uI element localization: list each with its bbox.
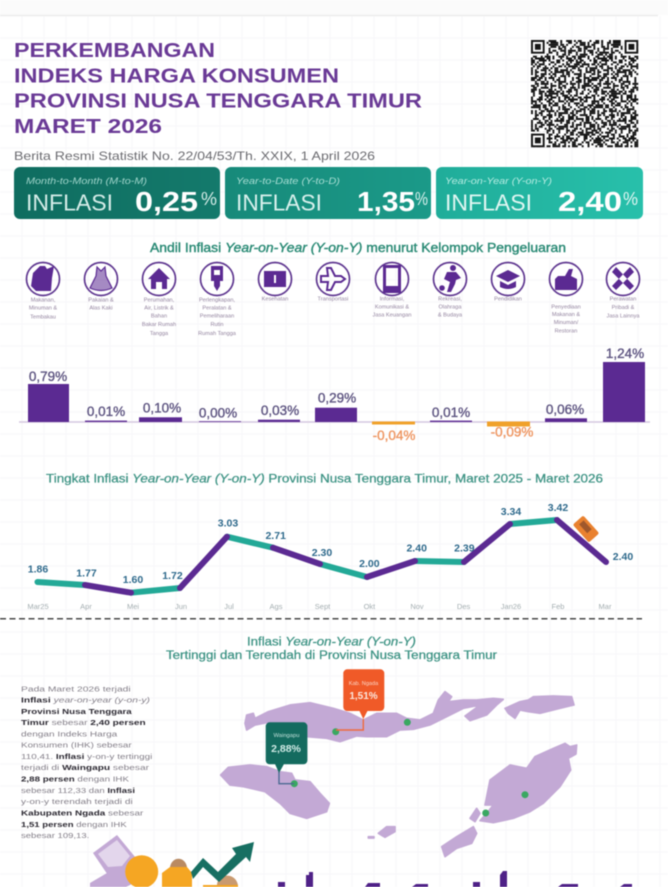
group labels: Minuman & [29, 306, 57, 312]
callout: Kab. Ngada lowest: Kab. Ngada [349, 681, 379, 687]
island: Flores [245, 692, 503, 742]
bar chart: contribution to inflation: 0,00% [199, 406, 237, 421]
group labels: Minuman/ [554, 320, 579, 326]
icon: coin [125, 855, 158, 887]
card: year-to-date inflation: 1,35 [357, 186, 415, 217]
text block: summary paragraph: sebesar 112,33 dan Inflasi [21, 786, 135, 795]
line chart: monthly y-on-y inflation: 1.72 [162, 570, 183, 582]
group labels: Perawatan [610, 297, 636, 303]
line chart: monthly y-on-y inflation: Jun [175, 602, 187, 611]
island: Timor [480, 743, 577, 823]
group labels: Restoran [555, 329, 577, 335]
heading: highest and lowest inflation: Tertinggi dan Terendah di Provinsi Nusa Tenggara Timur [166, 650, 497, 662]
group labels: Makanan, [31, 298, 56, 304]
title: MARET 2026 [14, 116, 162, 138]
island: Sabu [368, 827, 395, 838]
card: month-to-month inflation: Month-to-Month (M-to-M) [26, 176, 147, 187]
bar chart: contribution to inflation: 0,29% [318, 391, 356, 406]
bar chart: contribution to inflation: 0,10% [143, 401, 181, 416]
title: PROVINSI NUSA TENGGARA TIMUR [14, 90, 423, 112]
line chart: monthly y-on-y inflation: Nov [410, 602, 424, 611]
icon: banknotes [93, 835, 150, 887]
line chart: monthly y-on-y inflation: Feb [552, 602, 564, 611]
icon: household equipment [211, 266, 223, 291]
map: Nusa Tenggara Timur [221, 692, 577, 857]
group labels: Bahan [151, 314, 167, 320]
heading: inflation trend: Tingkat Inflasi Year-on-Year (Y-on-Y) Provinsi Nusa Tenggara Timur, Maret 2025 - Maret 2026 [46, 474, 603, 486]
line chart: monthly y-on-y inflation: Jan26 [501, 602, 521, 611]
line chart: monthly y-on-y inflation: Jul [224, 602, 234, 611]
group labels: Makanan & [552, 312, 580, 318]
group labels: Komunikasi & [375, 304, 409, 310]
group labels [29, 297, 640, 337]
group labels: Pakaian & [88, 298, 114, 304]
illustration: money, coins and rising arrow [90, 835, 254, 887]
icon row with group labels [26, 262, 640, 337]
line chart: monthly y-on-y inflation: 2.40 [613, 551, 633, 563]
card: year-on-year inflation: Year-on-Year (Y-on-Y) [445, 176, 552, 187]
line chart: monthly y-on-y inflation [27, 502, 633, 611]
QR code [531, 40, 638, 147]
line chart: monthly y-on-y inflation: Sept [315, 602, 331, 611]
group labels: Kesehatan [262, 297, 288, 303]
text block: summary paragraph: 2,88 persen dengan IHK [21, 775, 129, 784]
line chart: monthly y-on-y inflation: 1.60 [123, 574, 143, 586]
text block: summary paragraph: Konsumen (IHK) sebesar [21, 741, 132, 750]
text block: summary paragraph: 110,41. Inflasi y-on-y tertinggi [21, 752, 153, 761]
island: Sumba [221, 765, 329, 818]
line chart: monthly y-on-y inflation: 2.71 [265, 530, 286, 542]
map markers [291, 719, 528, 816]
card: month-to-month inflation [14, 167, 220, 219]
line chart: monthly y-on-y inflation: 2.00 [359, 558, 380, 570]
callout: Waingapu highest [266, 722, 307, 784]
card: year-on-year inflation: INFLASI [445, 190, 532, 216]
card: year-to-date inflation [225, 167, 431, 219]
text block: summary paragraph: dengan Indeks Harga [21, 730, 118, 739]
group labels: Pribadi & [612, 305, 635, 311]
line chart: monthly y-on-y inflation: Apr [80, 602, 92, 611]
heading: highest and lowest inflation [166, 637, 497, 662]
group labels: Pemeliharaan [200, 314, 234, 320]
group labels: Peralatan & [202, 306, 232, 312]
group labels: Olahraga [438, 304, 462, 310]
group labels: Jasa Keuangan [373, 313, 411, 319]
island: Rote [442, 827, 477, 857]
icon: education [496, 270, 520, 289]
island: Semau [470, 808, 480, 822]
icon: transport [321, 268, 345, 290]
bar chart: contribution to inflation [19, 346, 650, 443]
icon: money bags [162, 867, 192, 887]
heading: contribution by expenditure group: Andil Inflasi Year-on-Year (Y-on-Y) menurut Kelompok Pengeluaran [150, 240, 566, 255]
group labels: Bakar Rumah [142, 322, 176, 328]
icon: food [31, 266, 54, 291]
icon: house [148, 268, 170, 289]
card: year-to-date inflation: % [415, 189, 428, 209]
group labels: Transportasi [318, 297, 348, 303]
bar chart: contribution to inflation: -0,04% [373, 428, 415, 443]
line chart: monthly y-on-y inflation: Okt [364, 602, 376, 611]
callout: Kab. Ngada lowest: 1,51% [349, 691, 378, 702]
callout: Kab. Ngada lowest [336, 669, 384, 730]
group labels: Tangga [150, 331, 169, 337]
icon: clothing [90, 267, 112, 290]
text block: summary paragraph: 1,51 persen dengan IHK [21, 820, 127, 829]
card: month-to-month inflation: 0,25 [135, 186, 198, 217]
illustration: skyline [278, 871, 632, 887]
icon: recreation [439, 265, 461, 292]
line chart: monthly y-on-y inflation: Mar25 [27, 602, 49, 611]
publication reference: Berita Resmi Statistik No. 22/04/53/Th. XXIX, 1 April 2026 [14, 149, 375, 163]
title: PERKEMBANGAN [14, 40, 215, 62]
title: INDEKS HARGA KONSUMEN [14, 66, 339, 88]
bar chart: contribution to inflation: 1,24% [606, 346, 644, 361]
group labels: Informasi, [380, 297, 405, 303]
icon: health [264, 271, 286, 287]
line chart: monthly y-on-y inflation: 3.42 [548, 502, 568, 514]
text block: summary paragraph: sebesar 109,13. [21, 831, 89, 840]
line chart: monthly y-on-y inflation: 2.39 [454, 543, 475, 555]
heading: highest and lowest inflation: Inflasi Year-on-Year (Y-on-Y) [247, 637, 416, 649]
line chart: monthly y-on-y inflation: Des [457, 602, 471, 611]
card: year-to-date inflation: INFLASI [236, 190, 322, 216]
bar chart: contribution to inflation: 0,06% [546, 402, 584, 417]
title [14, 40, 423, 138]
line chart: monthly y-on-y inflation: 3.03 [218, 518, 238, 530]
icon: personal care [612, 267, 634, 290]
line chart: monthly y-on-y inflation: Ags [270, 602, 283, 611]
group labels: Perlengkapan, [199, 298, 235, 304]
island: Lembata and Alor [505, 696, 574, 718]
group labels: Penyediaan [551, 304, 581, 310]
group labels: Pendidikan [494, 297, 522, 303]
group labels: Tembakau [30, 314, 56, 320]
group labels: Rutin [210, 322, 224, 328]
line chart: monthly y-on-y inflation: 1.77 [76, 568, 97, 580]
bar chart: contribution to inflation: 0,01% [87, 404, 125, 419]
card: month-to-month inflation: INFLASI [26, 190, 113, 216]
bar chart: contribution to inflation: 0,79% [29, 369, 67, 384]
line chart: monthly y-on-y inflation: 3.34 [501, 506, 521, 518]
card: year-on-year inflation: 2,40 [558, 186, 622, 217]
line chart: monthly y-on-y inflation: 2.30 [312, 547, 332, 559]
text block: summary paragraph: Kabupaten Ngada sebesar [21, 809, 144, 818]
line chart: monthly y-on-y inflation: 1.86 [28, 564, 48, 576]
icon: food service [555, 269, 577, 290]
bar chart: contribution to inflation: 0,01% [432, 405, 470, 420]
text block: summary paragraph: y-on-y terendah terjadi di [21, 797, 133, 806]
group labels: Rekreasi, [438, 297, 462, 303]
group labels: & Budaya [438, 313, 463, 319]
card: month-to-month inflation: % [201, 189, 217, 209]
card: year-to-date inflation: Year-to-Date (Y-to-D) [236, 176, 340, 187]
text block: summary paragraph: terjadi di Waingapu sebesar [21, 763, 150, 772]
icon: orange truck on line [573, 515, 599, 543]
line chart: monthly y-on-y inflation: 2.40 [406, 543, 427, 555]
line chart: monthly y-on-y inflation: Mar [599, 602, 612, 611]
group labels: Jasa Lainnya [607, 314, 640, 320]
callout: Waingapu highest: 2,88% [271, 743, 302, 755]
icon: phone [383, 265, 401, 293]
text block: summary paragraph: Inflasi year-on-year (y-on-y) [21, 696, 151, 705]
text block: summary paragraph: Provinsi Nusa Tenggara [21, 707, 133, 716]
callout: Waingapu highest: Waingapu [274, 733, 299, 739]
group labels: Rumah Tangga [198, 331, 237, 337]
bar chart: contribution to inflation: 0,03% [261, 403, 299, 418]
group labels: Perumahan, [144, 298, 175, 304]
text block: summary paragraph: Pada Maret 2026 terjadi [21, 685, 131, 694]
group labels: Air, Listrik & [144, 306, 174, 312]
line chart: monthly y-on-y inflation: Mei [127, 602, 139, 611]
bar chart: contribution to inflation: -0,09% [491, 425, 533, 440]
card: year-on-year inflation: % [623, 189, 638, 209]
card: year-on-year inflation [436, 167, 643, 219]
icon: rising arrow [191, 842, 254, 882]
group labels: Alas Kaki [89, 306, 113, 312]
text block: summary paragraph: Timur sebesar 2,40 persen [21, 718, 146, 727]
text block: summary paragraph [21, 685, 153, 840]
